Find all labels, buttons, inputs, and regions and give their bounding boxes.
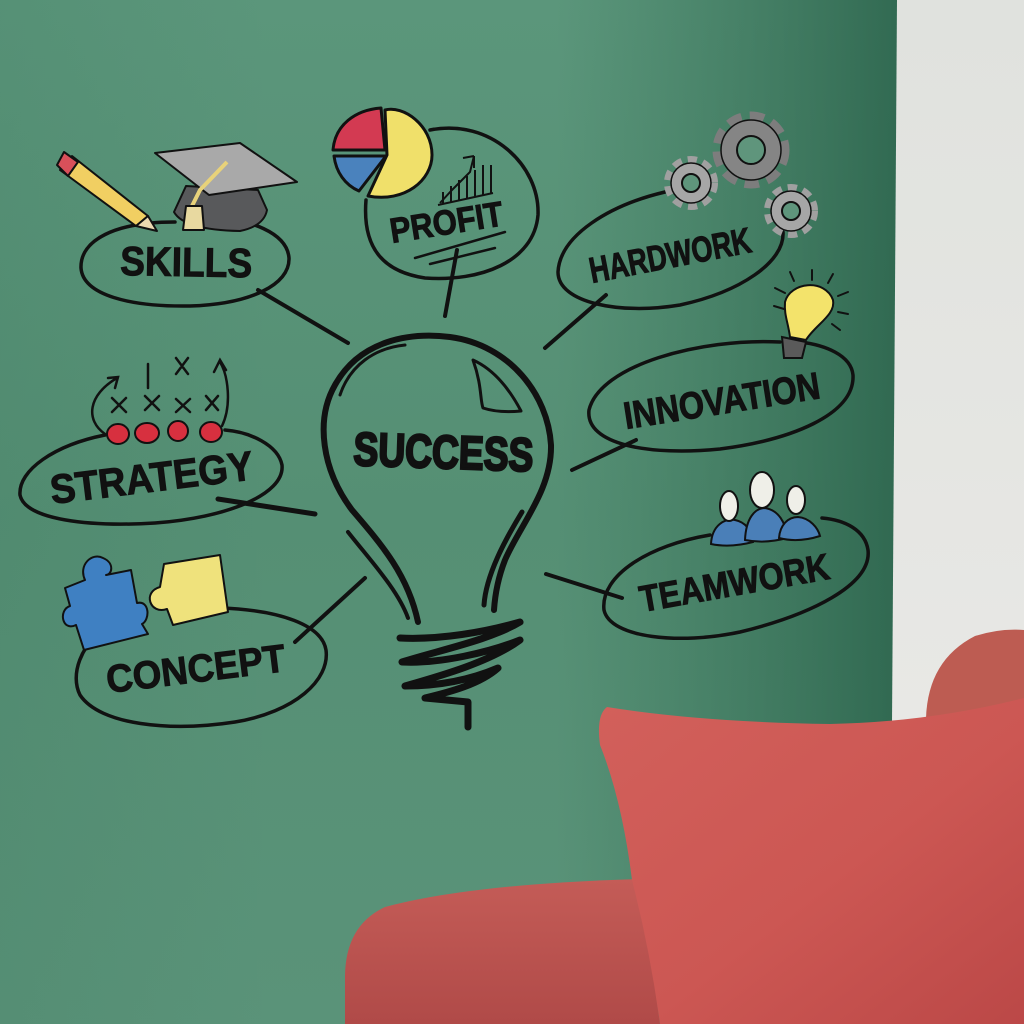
bubble: strategy [20,430,282,524]
sofa armrest [345,879,660,1024]
label: teamwork: TEAMWORK [636,546,833,620]
central light bulb outline [324,336,551,622]
label: skills: SKILLS [120,238,253,286]
label: strategy: STRATEGY [47,442,256,513]
icon: graduation cap [155,143,297,231]
bubble: hardwork [558,192,783,308]
icon: pencil [57,152,157,231]
icon: pie chart [333,108,432,197]
label: concept: CONCEPT [104,637,288,702]
label: innovation: INNOVATION [621,365,823,438]
sofa back cushion [926,630,1024,720]
icon: small idea bulb [774,270,848,358]
bubble: teamwork [604,518,868,638]
bulb base scribble [400,622,520,727]
bubble: skills [81,215,289,306]
background: white wall [892,0,1024,724]
profit mini chart underline [415,232,505,264]
label: profit: PROFIT [387,195,506,251]
icon: puzzle pieces [63,555,228,650]
icon: strategy play diagram [92,358,228,444]
title: success: SUCCESS [353,422,534,481]
bubble: innovation [589,342,853,451]
icon: profit arrow chart [438,156,493,205]
icon: gears [668,117,814,234]
label: hardwork: HARDWORK [586,219,755,291]
bubble: profit [366,128,538,278]
connector lines [218,250,636,642]
icon: team of people [711,472,820,546]
pillow [599,698,1024,1024]
bubble: concept [76,608,326,726]
